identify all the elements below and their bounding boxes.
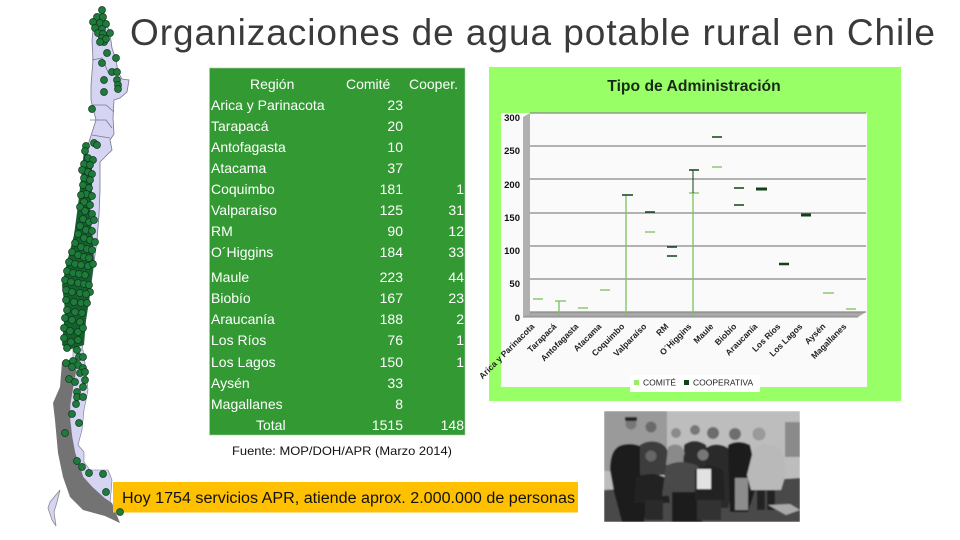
- y axis labels: 300: [504, 113, 520, 124]
- callout: service coverage banner: [113, 482, 578, 512]
- table row: Magallanes: Magallanes: [211, 396, 283, 412]
- x axis labels: Araucanía: [723, 321, 760, 357]
- table row: Arica y Parinacota: [211, 97, 403, 113]
- table row: Magallanes: [211, 396, 403, 412]
- x axis labels: Arica y Parinacota: [477, 321, 537, 381]
- cooperativa series markers: [622, 137, 811, 264]
- map: regional borders: [90, 58, 114, 138]
- table row: O'Higgins: O´Higgins: [211, 244, 273, 260]
- y axis labels: 0: [515, 313, 520, 324]
- table row: Araucanía: 2: [456, 311, 464, 327]
- table row: Antofagasta: 10: [387, 139, 403, 155]
- table row: Araucanía: [211, 311, 464, 327]
- table row: Total: [256, 417, 464, 433]
- x axis labels: Atacama: [571, 321, 604, 353]
- map: southernmost point marker: [116, 508, 124, 516]
- table row: Maule: [211, 269, 464, 285]
- x axis labels: Coquimbo: [590, 321, 626, 358]
- table row: Antofagasta: Antofagasta: [211, 139, 286, 155]
- x axis labels: Los Lagos: [767, 321, 805, 358]
- table row: Biobío: [211, 290, 464, 306]
- table header: Comité: [346, 76, 391, 92]
- chart legend: [630, 375, 760, 392]
- table row: Biobío: Biobío: [211, 290, 251, 306]
- table row: Maule: Maule: [211, 269, 249, 285]
- table row: Maule: 44: [448, 269, 464, 285]
- table row: Tarapacá: 20: [387, 118, 403, 134]
- table header: Cooper.: [409, 76, 458, 92]
- table row: O'Higgins: [211, 244, 464, 260]
- x axis labels: RM: [654, 321, 670, 338]
- table row: Total: Total: [256, 417, 286, 433]
- x axis labels: [477, 321, 849, 381]
- table row: Los Lagos: [211, 354, 464, 370]
- table row: Atacama: 37: [387, 160, 403, 176]
- map: dense central band of points: [62, 150, 94, 350]
- x axis labels: Biobío: [713, 321, 738, 347]
- callout: service coverage banner: Hoy 1754 servicios APR, atiende aprox. 2.000.000 de personas: [122, 490, 575, 507]
- table row: Los Lagos: 150: [380, 354, 403, 370]
- table row: RM: 90: [387, 223, 403, 239]
- y axis labels: 250: [504, 146, 520, 157]
- table row: Aysén: Aysén: [211, 375, 250, 391]
- table header: [250, 76, 458, 92]
- map of Chile with water organizations: [48, 6, 129, 526]
- table row: Aysén: [211, 375, 403, 391]
- table row: Araucanía: Araucanía: [211, 311, 275, 327]
- table row: O'Higgins: 33: [448, 244, 464, 260]
- table row: Magallanes: 8: [395, 396, 403, 412]
- plot area: [501, 113, 867, 387]
- table row: Maule: 223: [380, 269, 403, 285]
- table row: Los Ríos: [211, 332, 464, 348]
- table row: Coquimbo: Coquimbo: [211, 181, 275, 197]
- y axis labels: [504, 113, 520, 324]
- table row: Valparaíso: Valparaíso: [211, 202, 277, 218]
- chart background: [489, 67, 901, 401]
- table row: O'Higgins: 184: [380, 244, 403, 260]
- table row: Atacama: [211, 160, 403, 176]
- y axis labels: 150: [504, 213, 520, 224]
- table row: Los Ríos: 1: [456, 332, 464, 348]
- table background: [210, 68, 465, 435]
- source note: Fuente: MOP/DOH/APR (Marzo 2014): [232, 444, 452, 458]
- map: northern and central lavender territory: [73, 12, 129, 350]
- table row: Biobío: 167: [380, 290, 403, 306]
- x axis labels: O´Higgins: [658, 321, 694, 357]
- map: southern gray archipelago: [53, 358, 120, 523]
- table row: Valparaíso: [211, 202, 464, 218]
- x axis labels: Magallanes: [809, 321, 849, 361]
- table row: Araucanía: 188: [380, 311, 403, 327]
- table row: RM: [211, 223, 464, 239]
- map: green point markers: [60, 6, 122, 496]
- y axis labels: 100: [504, 246, 520, 257]
- map: southern lavender mainland: [70, 350, 112, 505]
- x axis labels: Valparaíso: [611, 321, 648, 358]
- photo of community group: [604, 411, 800, 522]
- table row: Arica y Parinacota: Arica y Parinacota: [211, 97, 325, 113]
- table row: Antofagasta: [211, 139, 403, 155]
- table row: Biobío: 23: [448, 290, 464, 306]
- comité series markers: [533, 167, 856, 316]
- x axis labels: Aysén: [803, 321, 827, 346]
- panel: administration chart: [477, 67, 901, 401]
- table row: Los Lagos: Los Lagos: [211, 354, 276, 370]
- table row: RM: RM: [211, 223, 233, 239]
- table row: Arica y Parinacota: 23: [387, 97, 403, 113]
- table row: RM: 12: [448, 223, 464, 239]
- table row: Atacama: Atacama: [211, 160, 266, 176]
- table row: Tarapacá: [211, 118, 403, 134]
- panel: data table: [210, 68, 465, 435]
- table row: Los Ríos: Los Ríos: [211, 332, 266, 348]
- x axis labels: Maule: [691, 321, 716, 345]
- chart legend: COMITÉ: [643, 378, 676, 388]
- x axis labels: Antofagasta: [539, 321, 581, 363]
- table header: Región: [250, 76, 294, 92]
- table row: Coquimbo: 1: [456, 181, 464, 197]
- chart title: Tipo de Administración: [607, 78, 781, 95]
- table row: Tarapacá: Tarapacá: [211, 118, 269, 134]
- table row: Coquimbo: [211, 181, 464, 197]
- x axis labels: Tarapacá: [525, 321, 559, 354]
- map: Tierra del Fuego fragment: [48, 490, 60, 526]
- chart legend: COOPERATIVA: [693, 378, 753, 388]
- table row: Los Ríos: 76: [387, 332, 403, 348]
- y axis labels: 200: [504, 180, 520, 191]
- table row: Los Lagos: 1: [456, 354, 464, 370]
- table row: Total: 1515: [372, 417, 403, 433]
- table row: Total: 148: [441, 417, 464, 433]
- table row: Valparaíso: 31: [448, 202, 464, 218]
- y axis labels: 50: [509, 279, 520, 290]
- x axis labels: Los Ríos: [750, 321, 783, 354]
- table row: Valparaíso: 125: [380, 202, 403, 218]
- table row: Aysén: 33: [387, 375, 403, 391]
- title: Organizaciones de agua potable rural en Chile: [130, 12, 935, 53]
- table row: Coquimbo: 181: [380, 181, 403, 197]
